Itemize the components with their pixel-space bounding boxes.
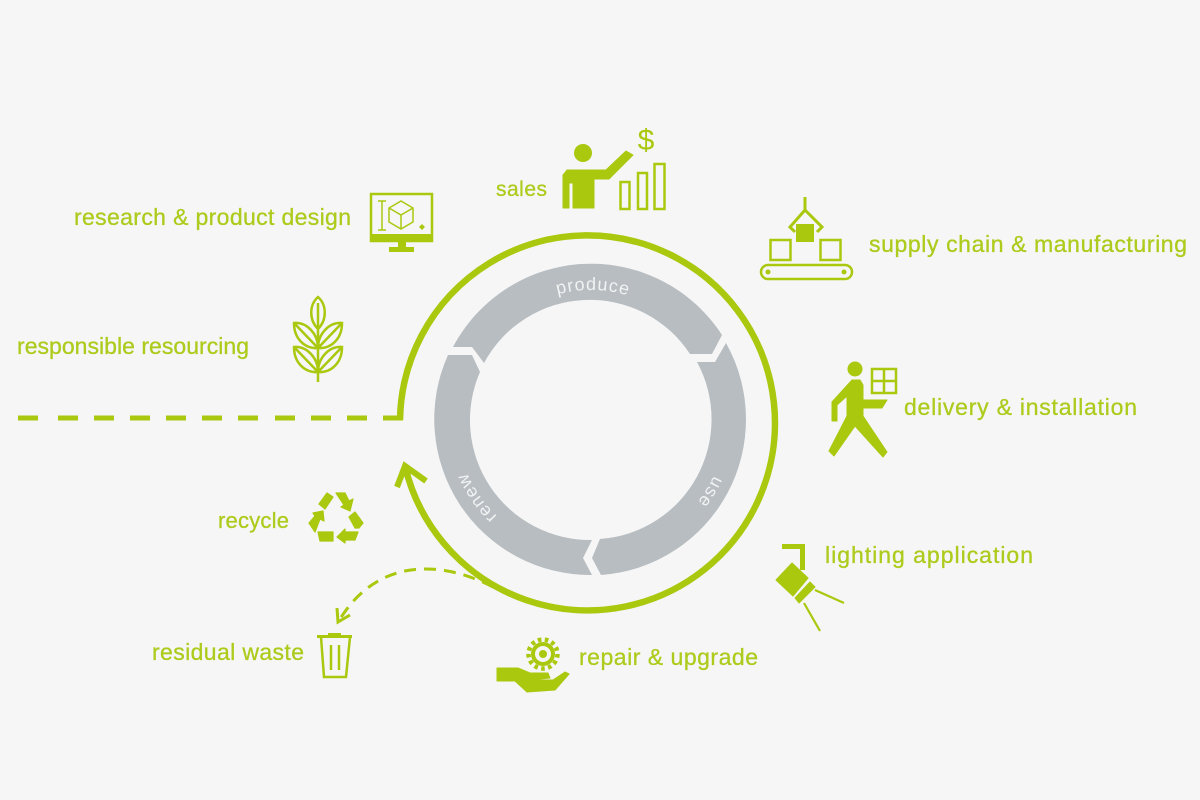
label: lighting application: lighting application xyxy=(825,542,1033,568)
segment: renew: renew xyxy=(458,475,496,522)
label: delivery and installation: delivery & installation xyxy=(904,394,1137,420)
icon: design monitor xyxy=(371,194,432,252)
icon: spotlight xyxy=(776,544,844,631)
segment: use xyxy=(592,343,746,575)
segment: produce xyxy=(453,264,722,363)
icon: sales person with chart xyxy=(563,124,664,209)
label: recycle: recycle xyxy=(218,508,289,533)
grey cycle ring xyxy=(434,264,746,575)
label: sales: sales xyxy=(496,178,547,201)
dashed arrow to residual waste xyxy=(337,569,493,622)
icon: delivery person xyxy=(829,362,896,457)
icon: sales person with chart: $ xyxy=(638,124,655,157)
dashed input line xyxy=(18,416,403,420)
icon: gear in hand xyxy=(497,640,569,692)
label: responsible resourcing: responsible resourcing xyxy=(17,333,249,359)
segment: use: use xyxy=(700,477,722,506)
label: research and product design: research & product design xyxy=(74,204,351,230)
segment: renew xyxy=(434,355,592,575)
icon: conveyor xyxy=(761,197,852,279)
icon: trash bin xyxy=(317,634,352,677)
outer green cycle arrow xyxy=(397,235,775,610)
label: supply chain and manufacturing: supply chain & manufacturing xyxy=(869,231,1187,257)
label: residual waste: residual waste xyxy=(152,639,304,665)
segment: produce: produce xyxy=(556,277,628,298)
label: repair and upgrade: repair & upgrade xyxy=(579,644,758,670)
icon: plant xyxy=(294,297,342,382)
icon: recycle arrows xyxy=(309,493,363,543)
